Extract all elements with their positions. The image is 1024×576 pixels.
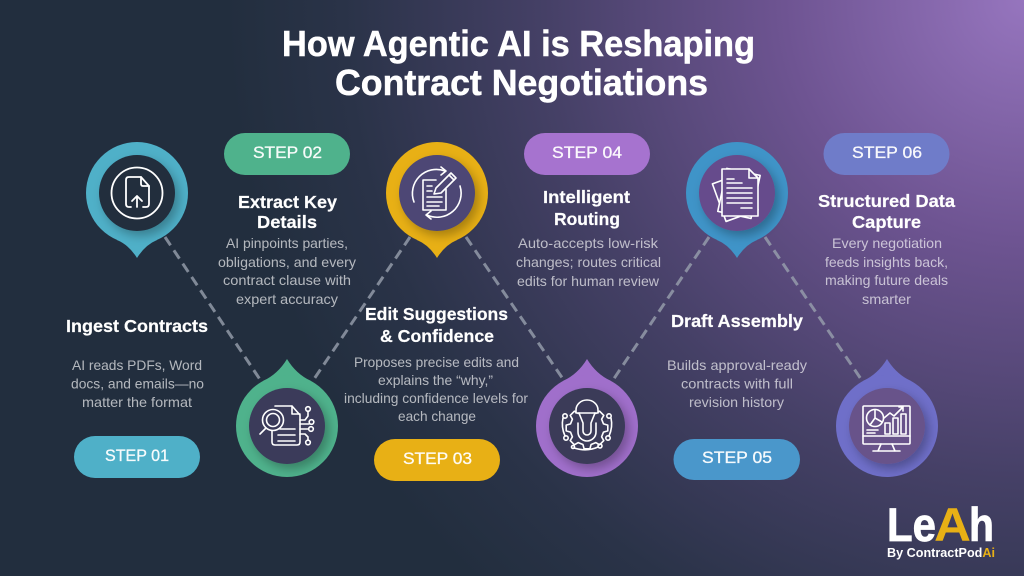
step 02 text block: AI pinpoints parties, — [226, 235, 348, 251]
step 06 text block: making future deals — [825, 272, 948, 288]
step 06 text block — [818, 191, 955, 307]
step 03 badge: STEP 03 — [403, 450, 472, 468]
step 05 text block: contracts with full — [681, 376, 793, 392]
step 05 text block: Draft Assembly — [671, 311, 803, 331]
step 05 pin with document stack icon — [686, 142, 788, 258]
logo: By ContractPodAi — [887, 545, 995, 560]
step 02 text block: expert accuracy — [236, 291, 338, 307]
step 05 badge — [674, 439, 800, 480]
step 06 badge: STEP 06 — [852, 144, 922, 162]
step 03 text block: Proposes precise edits and — [354, 354, 519, 370]
step 06 text block: Capture — [852, 212, 921, 232]
step 01 badge: STEP 01 — [105, 447, 169, 465]
step 03 text block: each change — [398, 408, 476, 424]
step 03 text block — [344, 304, 528, 424]
step 04 badge: STEP 04 — [552, 144, 622, 162]
step 02 text block: Extract Key — [238, 192, 337, 212]
logo: Le — [887, 498, 936, 551]
step 04 text block: Intelligent — [543, 187, 630, 207]
icon: document stack — [712, 168, 760, 221]
icon: engineering gear — [562, 400, 612, 450]
icon: edit document — [412, 167, 461, 219]
title: Contract Negotiations — [335, 62, 708, 103]
step 01 badge — [74, 436, 200, 478]
step 03 pin with edit document icon — [386, 142, 488, 258]
step 05 badge: STEP 05 — [702, 449, 772, 467]
logo: A — [934, 498, 971, 551]
title: How Agentic AI is Reshaping — [282, 23, 755, 64]
step 03 badge — [374, 439, 500, 481]
step 01 text block: docs, and emails—no — [71, 376, 204, 392]
step 02 badge: STEP 02 — [253, 144, 322, 162]
step 05 text block: revision history — [689, 394, 784, 410]
step 01 pin with document upload icon — [86, 142, 188, 258]
step 01 text block — [66, 316, 208, 410]
step 01 text block: AI reads PDFs, Word — [72, 357, 202, 373]
step 02 text block: obligations, and every — [218, 254, 356, 270]
step 05 text block: Builds approval-ready — [667, 357, 807, 373]
logo — [887, 498, 995, 560]
step 02 pin with document analysis icon — [236, 359, 338, 477]
step 02 text block — [218, 192, 356, 307]
icon: analytics monitor — [863, 406, 910, 451]
step 02 text block: contract clause with — [223, 272, 351, 288]
step 06 text block: Structured Data — [818, 191, 955, 211]
step 03 text block: including confidence levels for — [344, 390, 528, 406]
step 05 text block — [667, 311, 807, 410]
step 04 text block — [516, 187, 661, 289]
title — [282, 23, 755, 103]
step 04 text block: edits for human review — [517, 273, 660, 289]
dashed connector path — [165, 237, 863, 385]
step 04 badge — [524, 133, 650, 175]
step 03 text block: & Confidence — [380, 326, 494, 346]
step 06 pin with analytics monitor icon — [836, 359, 938, 477]
step 04 pin with engineering gear icon — [536, 359, 638, 477]
step 06 text block: Every negotiation — [832, 235, 942, 251]
step 06 text block: smarter — [862, 291, 911, 307]
step 04 text block: changes; routes critical — [516, 254, 661, 270]
step 01 text block: matter the format — [82, 394, 192, 410]
step 03 text block: Edit Suggestions — [365, 304, 508, 324]
step 03 text block: explains the “why,” — [378, 372, 493, 388]
step 04 text block: Auto-accepts low-risk — [518, 235, 659, 251]
icon: document upload — [112, 168, 162, 218]
step 02 text block: Details — [257, 212, 317, 232]
step 04 text block: Routing — [554, 209, 620, 229]
logo: h — [969, 498, 994, 551]
step 06 badge — [824, 133, 950, 175]
icon: document analysis — [260, 406, 314, 445]
step 02 badge — [224, 133, 350, 175]
step 06 text block: feeds insights back, — [825, 254, 948, 270]
step 01 text block: Ingest Contracts — [66, 316, 208, 336]
